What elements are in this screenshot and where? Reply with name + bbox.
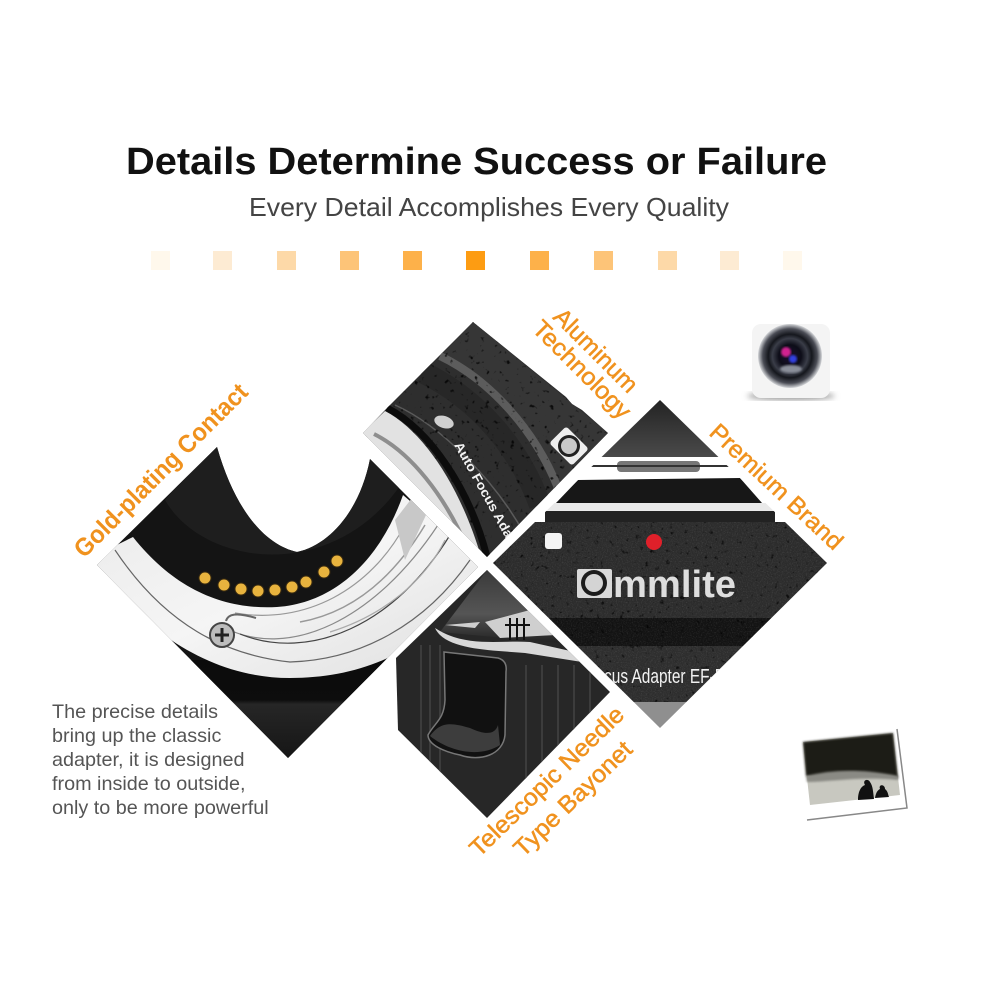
icon: camera lens	[747, 324, 835, 400]
label: telescopic needle type bayonet: Type Bayonet	[508, 736, 638, 862]
barrel lettering: Auto Focus Adapter	[451, 439, 529, 564]
textured body	[490, 522, 830, 618]
water speckles	[365, 322, 606, 536]
silver bayonet ring	[90, 495, 485, 678]
decorative gradient squares row	[151, 251, 802, 270]
inner barrel ribbing	[166, 447, 399, 554]
mount index dot	[434, 416, 454, 428]
top mount area	[440, 570, 528, 636]
chrome pin details	[445, 610, 555, 638]
label: aluminum technology: Aluminum	[548, 303, 643, 399]
black lining	[387, 408, 487, 557]
switch lever	[428, 652, 506, 758]
label: telescopic needle type bayonet: Telescopic Needle	[464, 701, 630, 862]
ring groove lines	[115, 525, 470, 662]
icon: polaroid photo	[803, 729, 907, 820]
red index dot	[646, 534, 662, 550]
upper dark triangle	[602, 400, 718, 457]
brand name: mmlite	[613, 564, 736, 606]
subtitle: Every Detail Accomplishes Every Quality	[249, 192, 729, 222]
label: aluminum technology: Technology	[527, 315, 636, 425]
body text: The precise details	[52, 701, 218, 723]
panel: aluminum technology photo	[363, 322, 608, 557]
gold contacts	[199, 555, 343, 597]
small logo mark	[550, 428, 588, 464]
chrome lever	[617, 461, 700, 472]
lighter upper band	[466, 322, 608, 482]
body text: only to be more powerful	[52, 797, 269, 819]
body text: from inside to outside,	[52, 773, 246, 795]
lower dark barrel	[191, 660, 386, 758]
thin highlight arc	[394, 404, 520, 525]
adapter lettering: Focus Adapter EF-E	[586, 666, 725, 688]
brand logo mark	[577, 569, 612, 598]
water speckles	[490, 522, 830, 702]
dark collar	[556, 478, 762, 503]
label: premium brand: Premium Brand	[704, 419, 848, 556]
chrome band	[545, 503, 775, 511]
dark band	[422, 372, 540, 505]
panel: premium brand photo	[490, 398, 830, 730]
silver ring edge	[435, 628, 582, 662]
panel: telescopic needle bayonet photo	[390, 565, 615, 825]
label: gold-plating contact: Gold-plating Contact	[68, 378, 254, 563]
silhouettes	[858, 780, 889, 800]
white index mark	[545, 533, 562, 549]
body text: adapter, it is designed	[52, 749, 244, 771]
title: Details Determine Success or Failure	[126, 141, 827, 183]
screw	[210, 614, 256, 647]
ribbed grip lines	[421, 645, 590, 790]
bright worn strip	[440, 356, 558, 488]
panel: gold-plating contact photo	[90, 440, 490, 765]
body text: bring up the classic	[52, 725, 221, 747]
silver crescent	[363, 411, 478, 548]
